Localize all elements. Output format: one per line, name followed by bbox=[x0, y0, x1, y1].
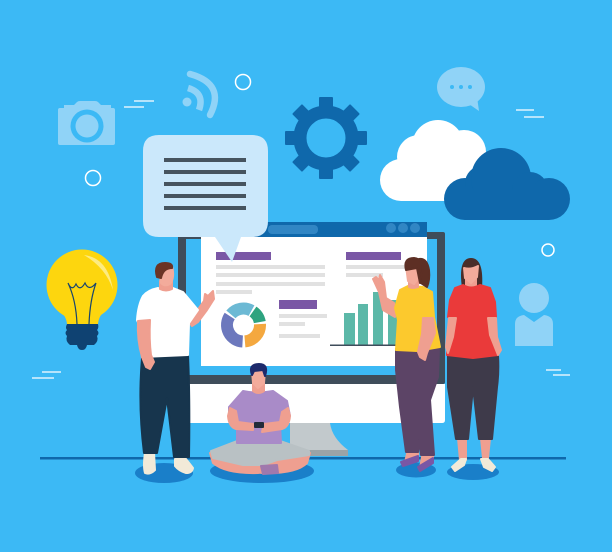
speech bubble with text lines bbox=[143, 135, 268, 262]
icon: gear bbox=[285, 97, 367, 179]
icon: user silhouette bbox=[515, 283, 553, 346]
ground line bbox=[40, 457, 566, 460]
figure: standing man in white shirt bbox=[135, 263, 214, 483]
icon: blue cloud bbox=[444, 148, 570, 220]
figure: woman in red shirt bbox=[446, 259, 501, 480]
monitor bbox=[178, 222, 445, 456]
monitor stand bbox=[290, 423, 348, 456]
document text lines bbox=[216, 252, 406, 338]
monitor chin bbox=[178, 384, 445, 423]
monitor screen bbox=[186, 239, 437, 375]
icon: white cloud bbox=[380, 120, 497, 201]
icon: chat bubble bbox=[437, 67, 485, 111]
icon: wifi signal bbox=[182, 74, 215, 115]
decorative rings bbox=[86, 74, 554, 256]
browser header bbox=[201, 222, 427, 238]
donut chart bbox=[227, 309, 260, 342]
figure: seated man with phone bbox=[210, 364, 314, 483]
figure: woman in yellow shirt bbox=[373, 258, 440, 478]
icon: camera bbox=[58, 101, 115, 145]
browser page bbox=[201, 237, 427, 366]
decorative dashes bbox=[32, 101, 570, 378]
bar chart bbox=[330, 292, 398, 346]
monitor frame bbox=[178, 232, 445, 384]
icon: light bulb bbox=[46, 250, 118, 350]
